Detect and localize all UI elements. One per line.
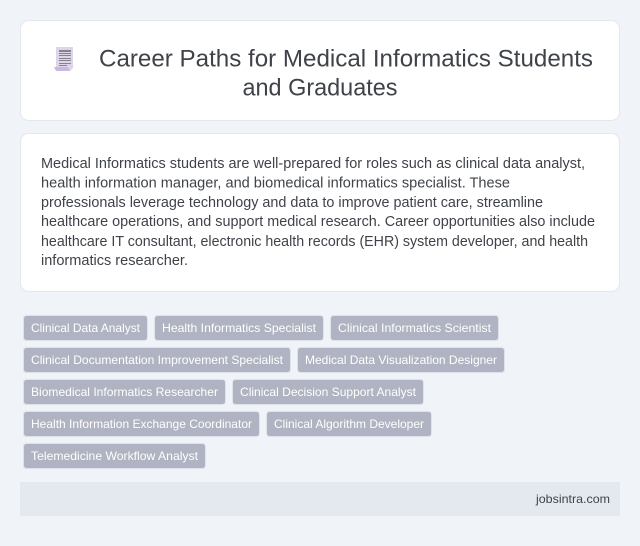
text block: description: Medical Informatics students are well-prepared for roles such as clinical data analyst, bbox=[41, 156, 585, 172]
panel: description bbox=[20, 134, 620, 292]
tag: Medical Data Visualization Designer bbox=[305, 353, 497, 367]
text block: description: healthcare IT consultant, electronic health records (EHR) system developer, and health bbox=[41, 234, 588, 250]
tag bbox=[266, 412, 432, 436]
tag bbox=[24, 348, 290, 372]
tag bbox=[330, 316, 498, 340]
tag: Health Informatics Specialist bbox=[162, 321, 317, 335]
tag: Telemedicine Workflow Analyst bbox=[31, 449, 199, 463]
tag list bbox=[24, 316, 504, 468]
heading: Career Paths for Medical Informatics Students bbox=[99, 46, 593, 72]
tag bbox=[232, 380, 424, 404]
tag bbox=[24, 316, 148, 340]
footer source text: jobsintra.com bbox=[535, 492, 610, 506]
tag bbox=[24, 444, 206, 468]
panel: title card bbox=[20, 20, 620, 120]
tag: Clinical Documentation Improvement Specialist bbox=[31, 353, 284, 367]
tag bbox=[24, 380, 226, 404]
icon: medical document scroll bbox=[54, 47, 73, 71]
tag bbox=[24, 412, 260, 436]
tag bbox=[154, 316, 324, 340]
text block: description: informatics researcher. bbox=[41, 253, 188, 269]
tag bbox=[298, 348, 504, 372]
tag: Clinical Decision Support Analyst bbox=[240, 385, 417, 399]
text block: description: healthcare operations, and support medical research. Career opportunities also include bbox=[41, 214, 595, 230]
tag: Health Information Exchange Coordinator bbox=[31, 417, 252, 431]
tag: Biomedical Informatics Researcher bbox=[31, 385, 218, 399]
heading: and Graduates bbox=[242, 74, 398, 102]
footer bar bbox=[20, 482, 620, 516]
tag: Clinical Algorithm Developer bbox=[274, 417, 424, 431]
text block: description bbox=[41, 156, 595, 269]
text block: description: health information manager, and biomedical informatics specialist. These bbox=[41, 175, 510, 191]
tag: Clinical Informatics Scientist bbox=[338, 321, 492, 335]
tag: Clinical Data Analyst bbox=[31, 321, 141, 335]
text block: description: professionals leverage technology and data to improve patient care, streamline bbox=[41, 195, 543, 211]
heading bbox=[99, 46, 593, 102]
